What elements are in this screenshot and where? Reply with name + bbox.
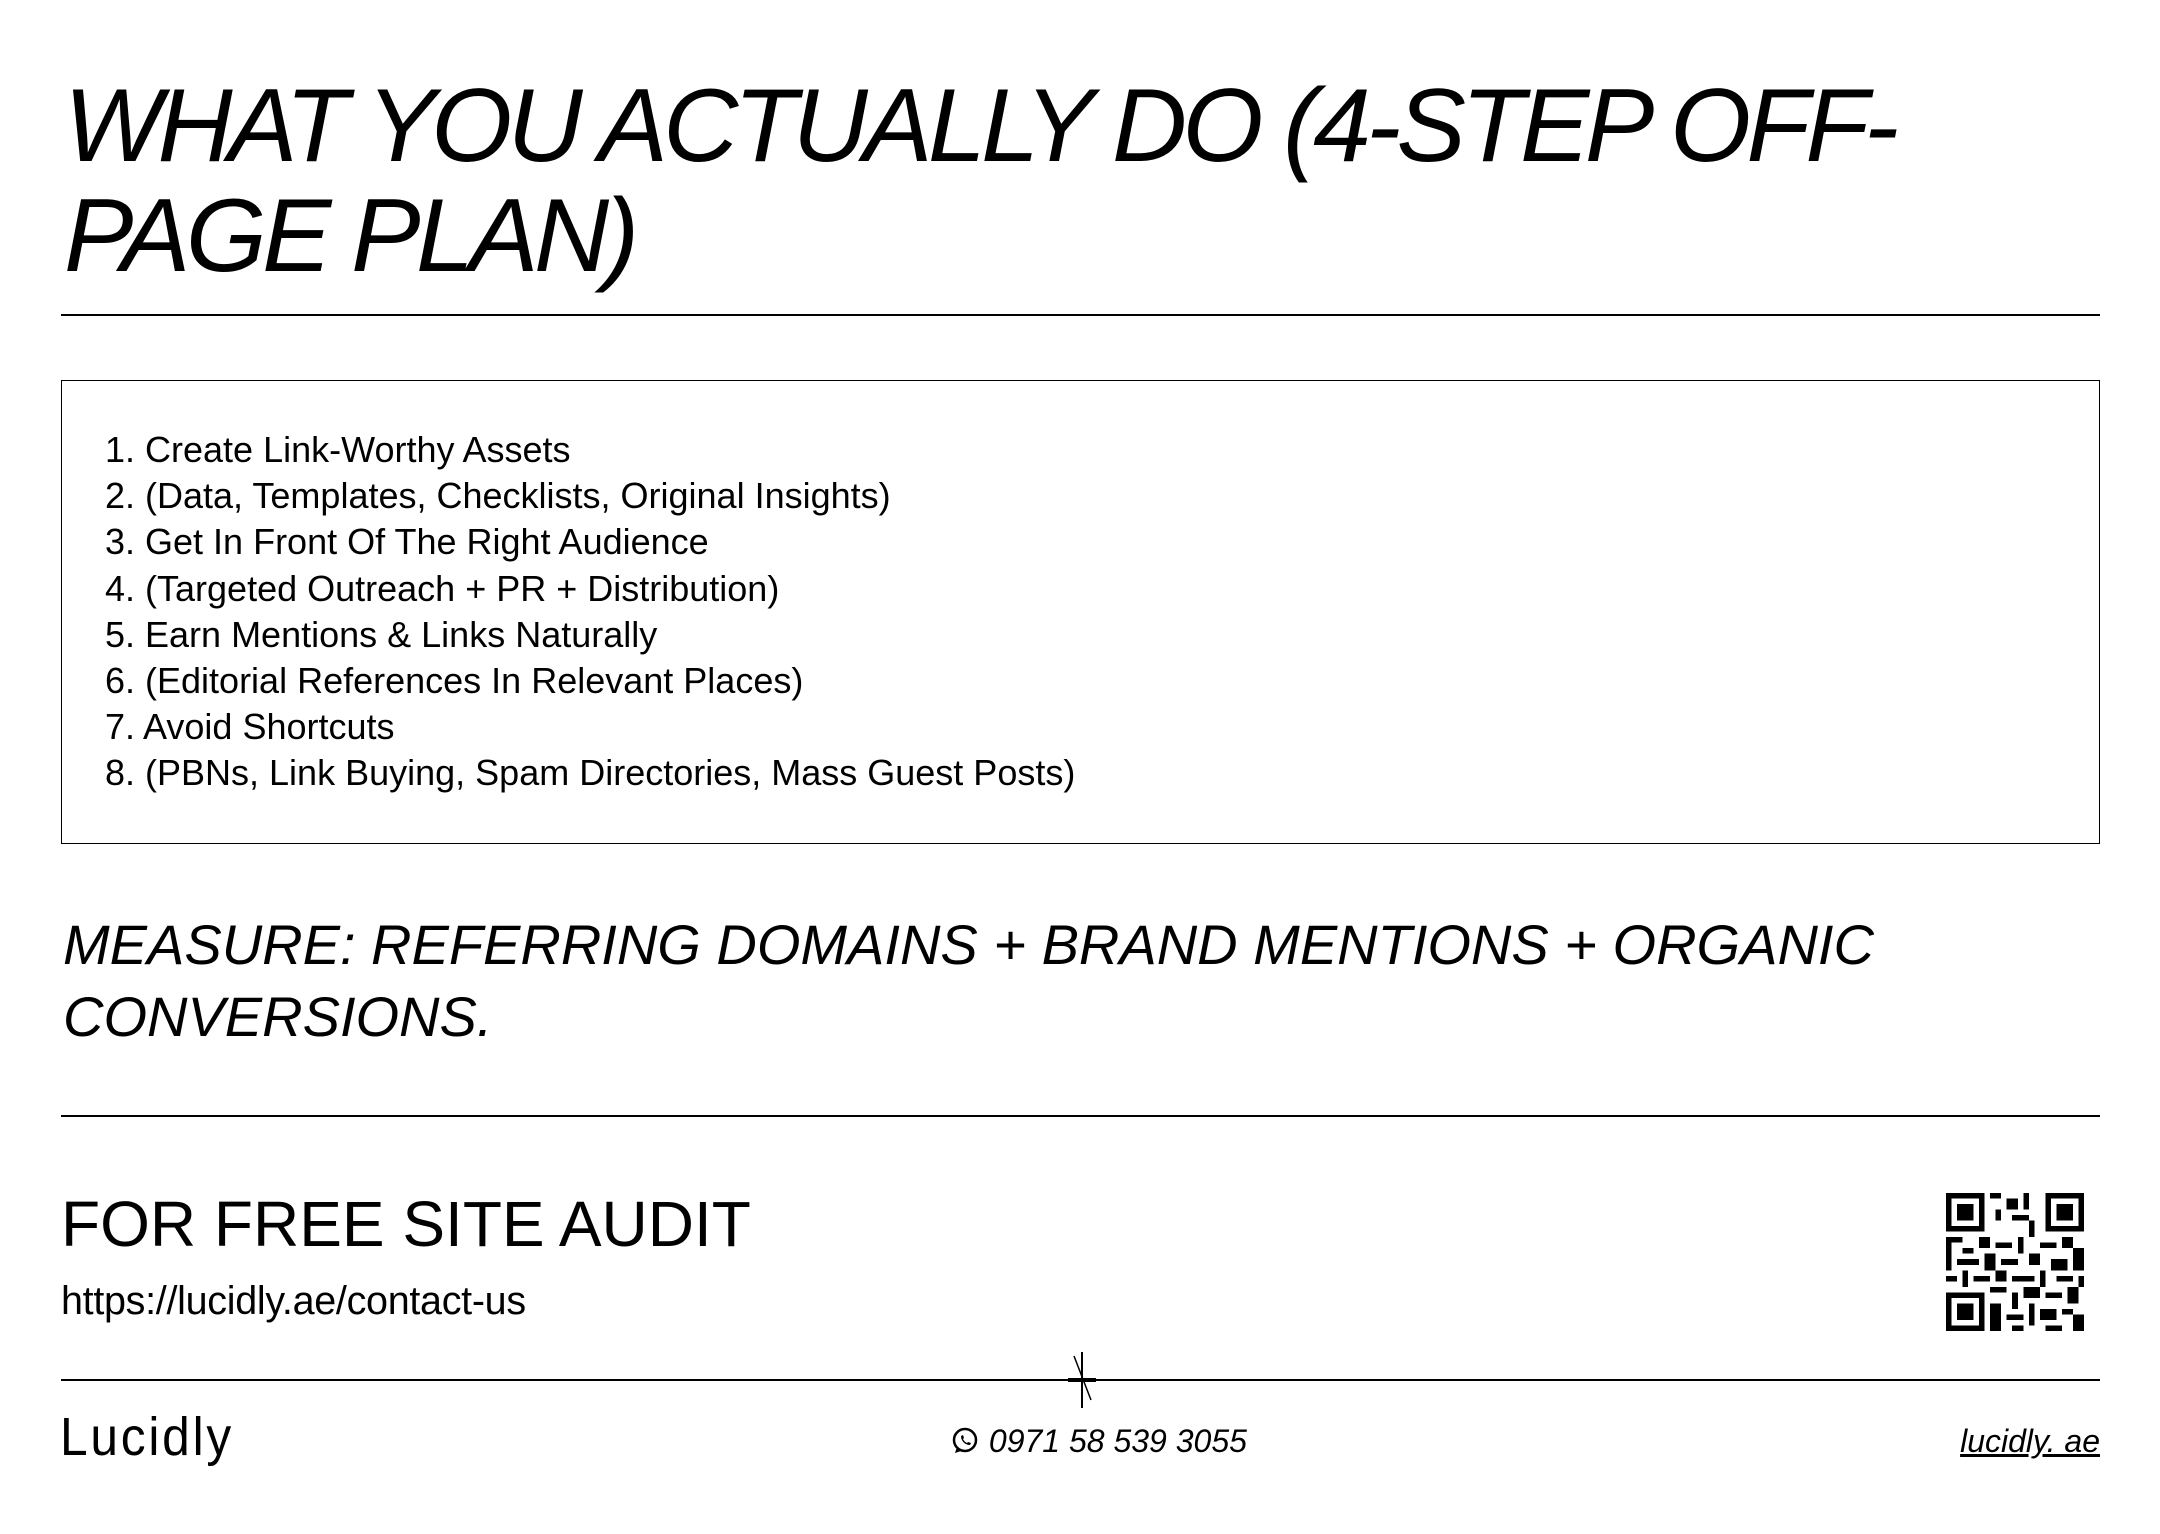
list of steps: 5. Earn Mentions & Links Naturally bbox=[105, 614, 657, 655]
icon: whatsapp bbox=[952, 1428, 978, 1453]
measure statement: MEASURE: REFERRING DOMAINS + BRAND MENTIONS + ORGANIC bbox=[63, 913, 1874, 976]
list of steps: 3. Get In Front Of The Right Audience bbox=[105, 521, 709, 562]
title: WHAT YOU ACTUALLY DO (4-STEP OFF- bbox=[64, 68, 1894, 184]
CTA heading: FOR FREE SITE AUDIT bbox=[61, 1188, 751, 1260]
list of steps: 2. (Data, Templates, Checklists, Original Insights) bbox=[105, 475, 891, 516]
list of steps: 8. (PBNs, Link Buying, Spam Directories, Mass Guest Posts) bbox=[105, 752, 1075, 793]
measure statement bbox=[63, 913, 1874, 1048]
list of steps: 1. Create Link-Worthy Assets bbox=[105, 429, 571, 470]
icon: crosshair bbox=[1068, 1352, 1096, 1408]
title: PAGE PLAN) bbox=[64, 178, 634, 294]
list of steps: 4. (Targeted Outreach + PR + Distribution) bbox=[105, 568, 779, 609]
list of steps: 6. (Editorial References In Relevant Places) bbox=[105, 660, 803, 701]
measure statement: CONVERSIONS. bbox=[63, 985, 492, 1048]
list of steps bbox=[105, 429, 1075, 793]
icon: QR code bbox=[1946, 1193, 2084, 1331]
panel: steps list bbox=[61, 380, 2100, 844]
website link: lucidly. ae bbox=[1960, 1423, 2100, 1459]
CTA url: https://lucidly.ae/contact-us bbox=[61, 1279, 526, 1323]
contact phone: 0971 58 539 3055 bbox=[989, 1423, 1247, 1459]
logo: Lucidly bbox=[60, 1407, 234, 1467]
list of steps: 7. Avoid Shortcuts bbox=[105, 706, 395, 747]
title bbox=[64, 68, 1896, 294]
